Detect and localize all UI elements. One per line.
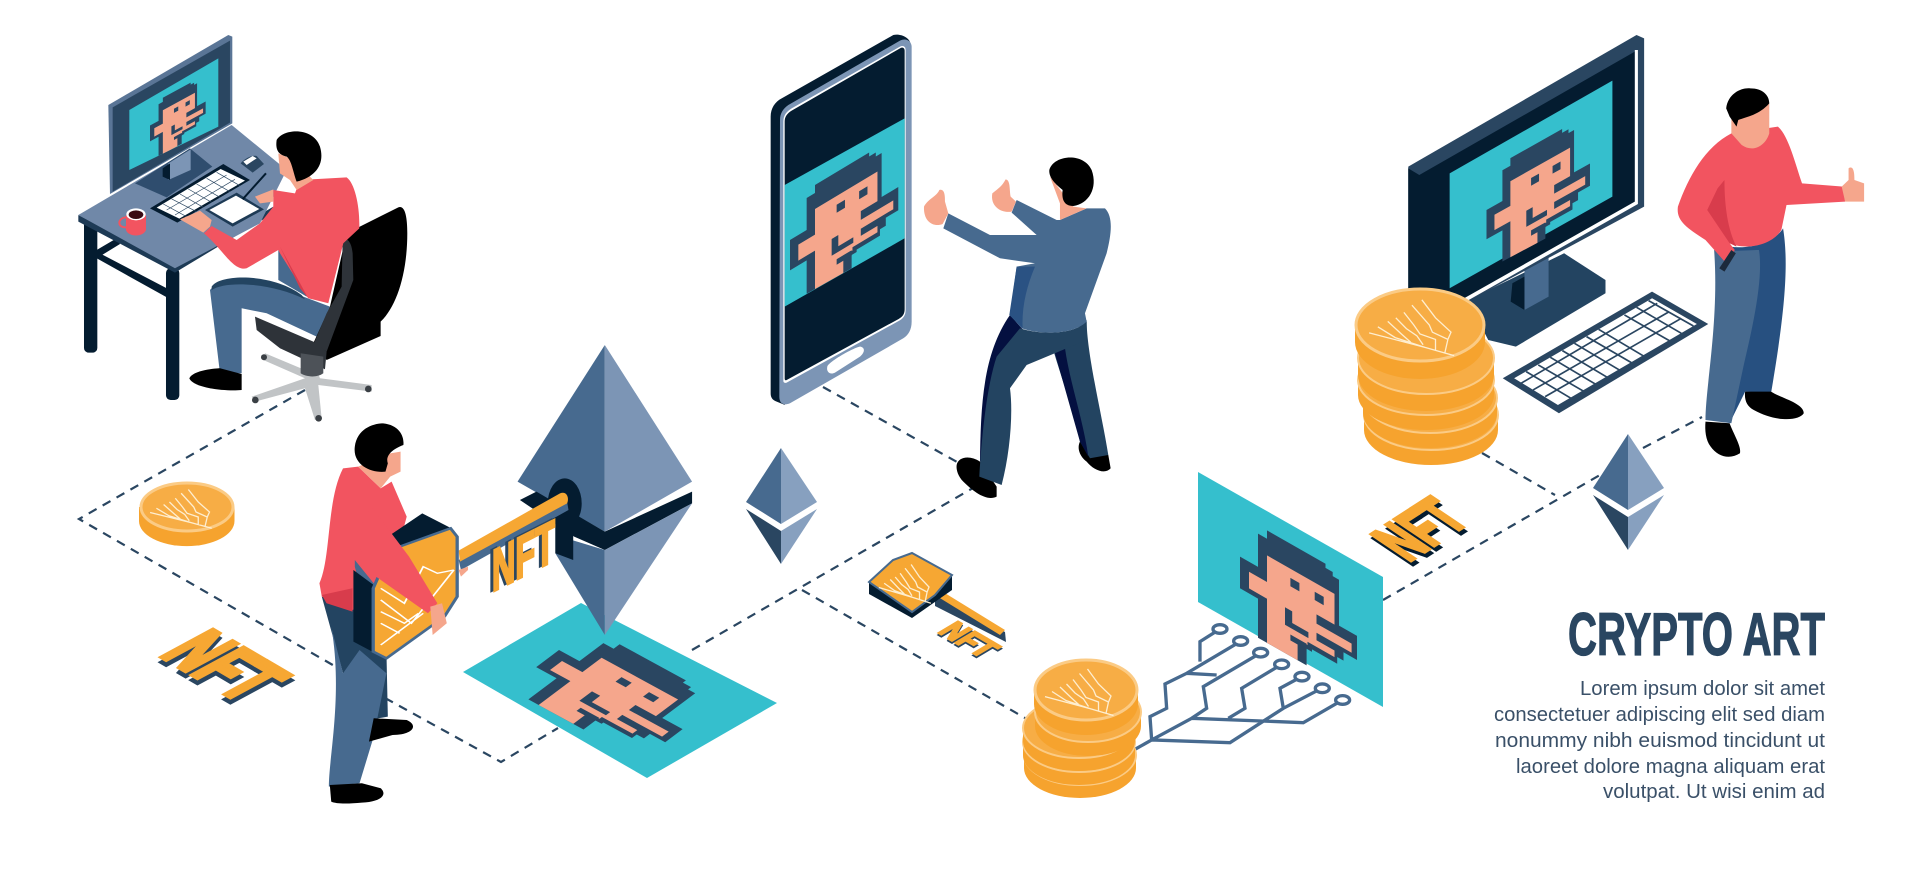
back leg: [1079, 442, 1111, 471]
NFT label floor: NFT: [143, 625, 307, 717]
desk artist scene: [78, 35, 407, 422]
key shaft: [459, 493, 568, 570]
mug: [119, 208, 146, 235]
head: [1049, 157, 1094, 220]
thumbs up man right: [1678, 88, 1864, 457]
NFT label right: NFT: [1357, 488, 1482, 570]
keyboard right: [1503, 292, 1708, 413]
man shoes: [330, 783, 383, 804]
NFT label floor: NFT: [143, 620, 307, 712]
artist pants: [210, 281, 330, 373]
man legs: [322, 597, 388, 720]
head: [1726, 88, 1769, 148]
teal art panel with pixel face: [1198, 472, 1383, 707]
man arm: [355, 507, 437, 613]
floor rhombus with pixel face: [463, 603, 777, 778]
artist hands: [180, 189, 273, 233]
phone: [771, 35, 912, 405]
keyboard: [150, 164, 250, 223]
front shoe: [957, 458, 997, 498]
connector lines: [79, 387, 1702, 762]
tablet and pen: [205, 173, 266, 227]
office chair: [252, 207, 407, 422]
key head: [353, 513, 457, 658]
mouse: [241, 156, 264, 173]
artist shirt: [204, 177, 359, 303]
circuit network: [1135, 625, 1350, 749]
description text: [1494, 678, 1825, 803]
coin stack right: [1355, 289, 1498, 465]
desk top: [78, 207, 273, 273]
NFT label on key: NFT: [489, 508, 552, 605]
jacket: [943, 200, 1111, 333]
description text: consectetuer adipiscing elit sed diam: [1494, 704, 1825, 726]
big ethereum keyhole: [518, 345, 692, 635]
key man and big key: [319, 423, 568, 804]
pocket phone: [1719, 250, 1736, 272]
desk monitor pixel face: [150, 82, 206, 156]
thumbs up man: [924, 157, 1111, 498]
description text: Lorem ipsum dolor sit amet: [1580, 678, 1825, 700]
shirt: [1678, 127, 1845, 263]
gold coin left: [139, 483, 234, 546]
coin stack bottom: [1023, 660, 1141, 798]
legs: [1730, 228, 1786, 423]
NFT label on key: NFT: [492, 508, 555, 605]
NFT label right: NFT: [1359, 492, 1484, 574]
description text: laoreet dolore magna aliquam erat: [1516, 756, 1825, 778]
phone pixel face: [790, 152, 898, 294]
man head: [355, 423, 404, 488]
artist shoe: [189, 368, 242, 390]
hands: [924, 179, 1016, 225]
hand: [1842, 168, 1864, 202]
desktop monitor: [1408, 35, 1644, 347]
desk legs: [84, 220, 179, 400]
description text: nonummy nibh euismod tincidunt ut: [1495, 730, 1825, 752]
monitor pixel face: [1486, 129, 1590, 262]
description text: volutpat. Ut wisi enim ad: [1603, 781, 1825, 803]
right ethereum icon: [1593, 434, 1664, 550]
center ethereum icon: [746, 448, 817, 564]
monitor: [108, 35, 232, 197]
man shirt: [319, 467, 407, 610]
small key icon: [869, 553, 1006, 642]
NFT label small key: NFT: [930, 617, 1006, 662]
shoes: [1705, 422, 1740, 457]
artist head: [276, 131, 321, 190]
NFT label small key: NFT: [930, 619, 1006, 664]
front leg: [980, 315, 1023, 463]
